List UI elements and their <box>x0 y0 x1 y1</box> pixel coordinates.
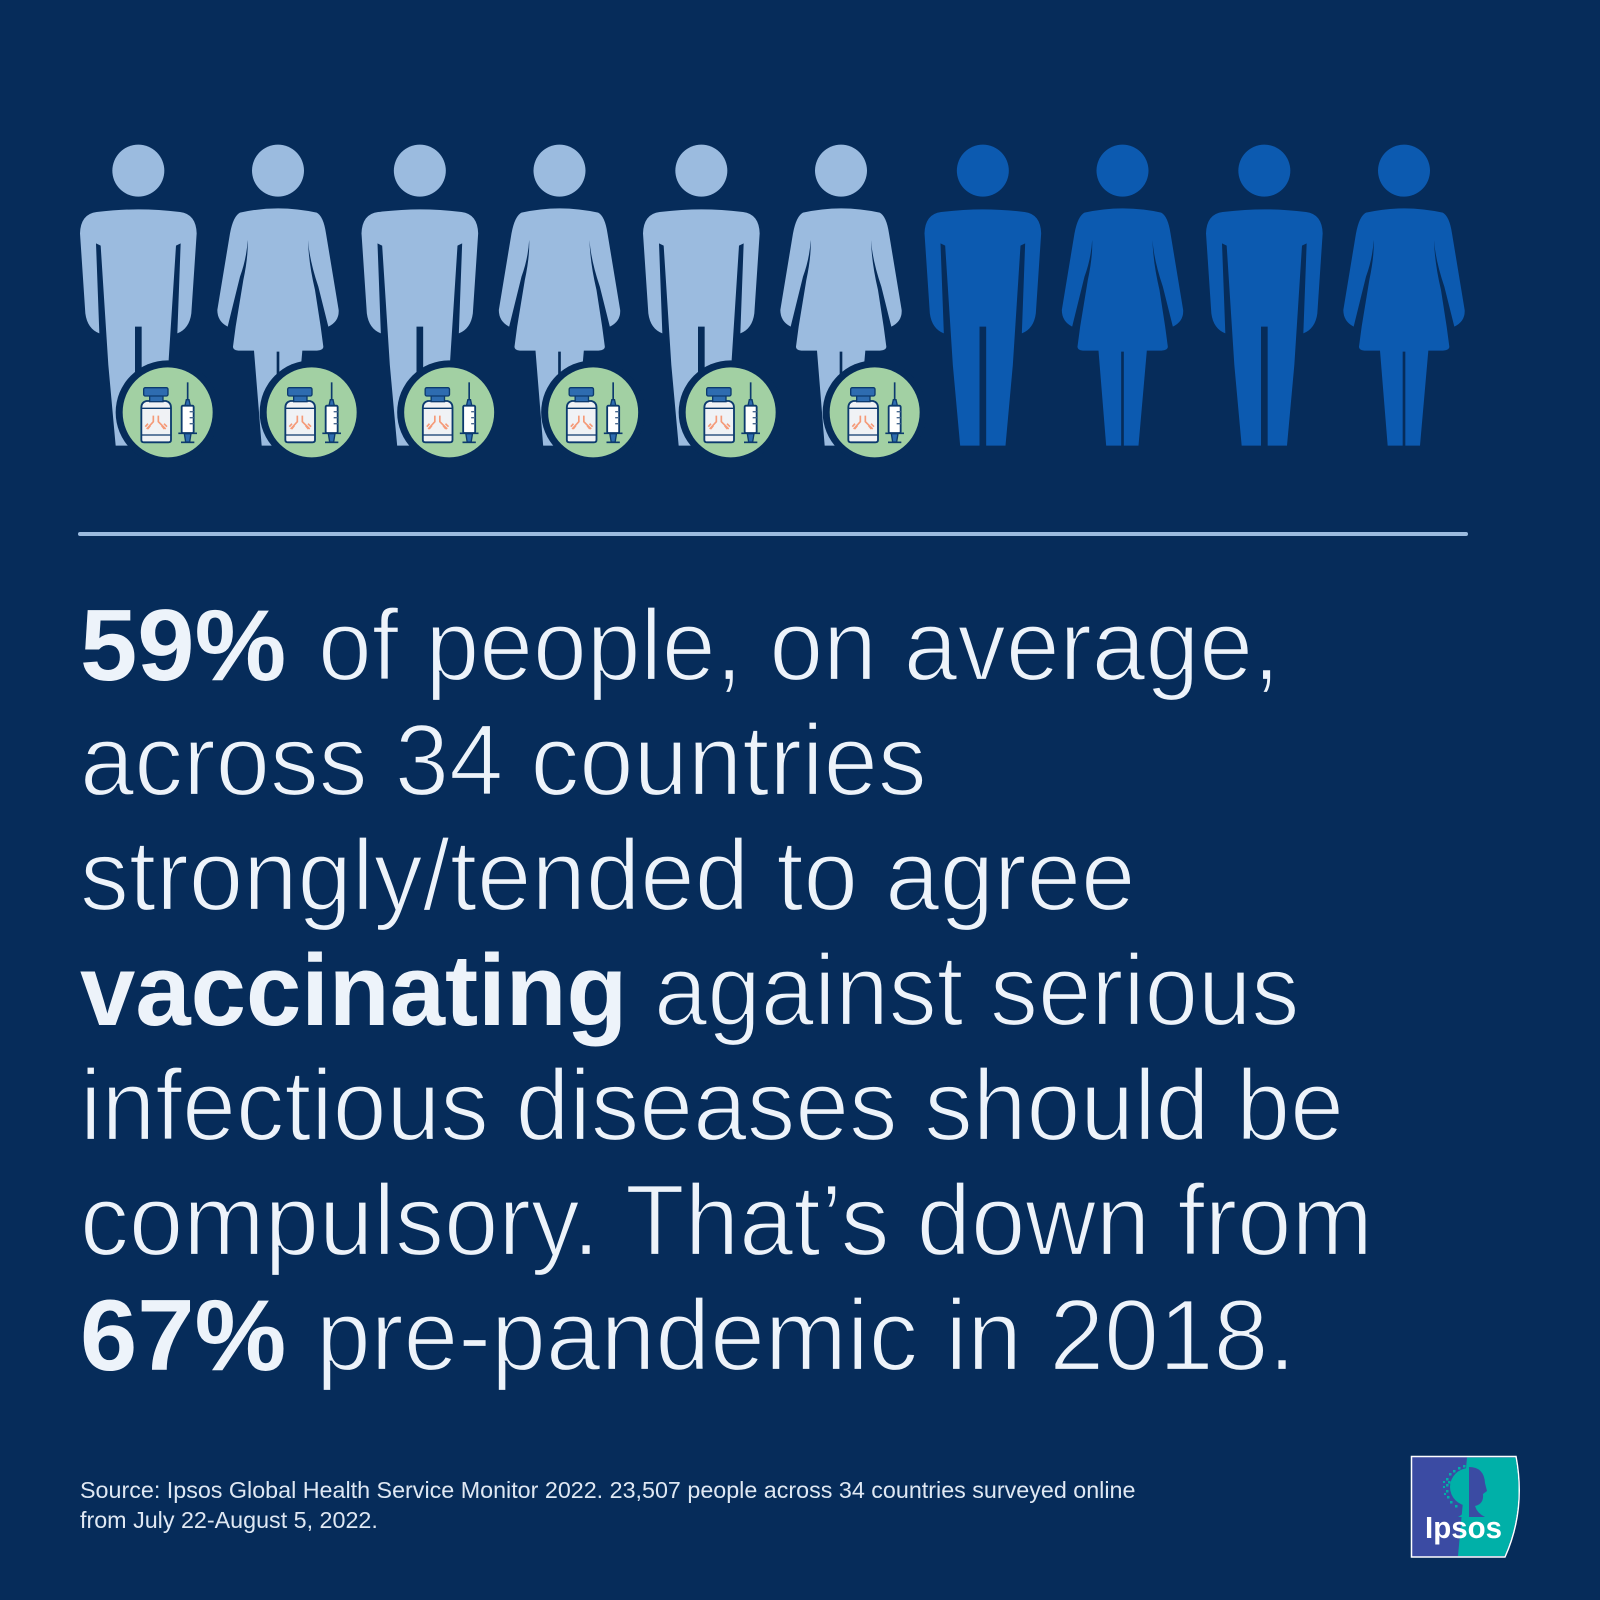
main statement text: infectious diseases should be <box>80 1048 1344 1161</box>
source note: Source: Ipsos Global Health Service Monitor 2022. 23,507 people across 34 countries surveyed online <box>80 1477 1135 1503</box>
person 3: man, vaccinated <box>361 145 478 446</box>
main statement text: strongly/tended to agree <box>80 820 1135 932</box>
person 7: man <box>924 145 1041 446</box>
person 4: woman, vaccinated <box>499 145 620 446</box>
icon: vaccine badge 3 <box>397 360 501 464</box>
source note <box>80 1477 1135 1533</box>
icon: vaccine badge 5 <box>679 360 783 464</box>
person 9: man <box>1206 145 1323 446</box>
main statement text: across 34 countries <box>80 705 927 817</box>
pictogram row: ten people, six highlighted <box>80 145 1465 464</box>
icon: vaccine badge 1 <box>116 360 220 464</box>
main statement text: 59% <box>80 589 286 702</box>
main statement text: pre-pandemic in 2018. <box>316 1280 1296 1392</box>
logo: Ipsos <box>1412 1456 1519 1557</box>
source note: from July 22-August 5, 2022. <box>80 1507 378 1533</box>
main statement text: against serious <box>654 934 1299 1047</box>
person 6: woman, vaccinated <box>780 145 902 446</box>
person 1: man, vaccinated <box>80 145 197 446</box>
person 10: woman <box>1343 145 1465 446</box>
main statement text: of people, on average, <box>318 589 1280 701</box>
main statement text: compulsory. That’s down from <box>80 1165 1373 1277</box>
main statement text <box>80 589 1373 1392</box>
main statement text: 67% <box>80 1279 286 1392</box>
icon: vaccine badge 4 <box>541 360 645 464</box>
icon: vaccine badge 2 <box>260 360 364 464</box>
main statement text: vaccinating <box>80 934 627 1047</box>
icon: vaccine badge 6 <box>823 360 927 464</box>
person 5: man, vaccinated <box>643 145 760 446</box>
logo: Ipsos: Ipsos <box>1425 1510 1502 1545</box>
person 8: woman <box>1062 145 1183 446</box>
person 2: woman, vaccinated <box>217 145 339 446</box>
